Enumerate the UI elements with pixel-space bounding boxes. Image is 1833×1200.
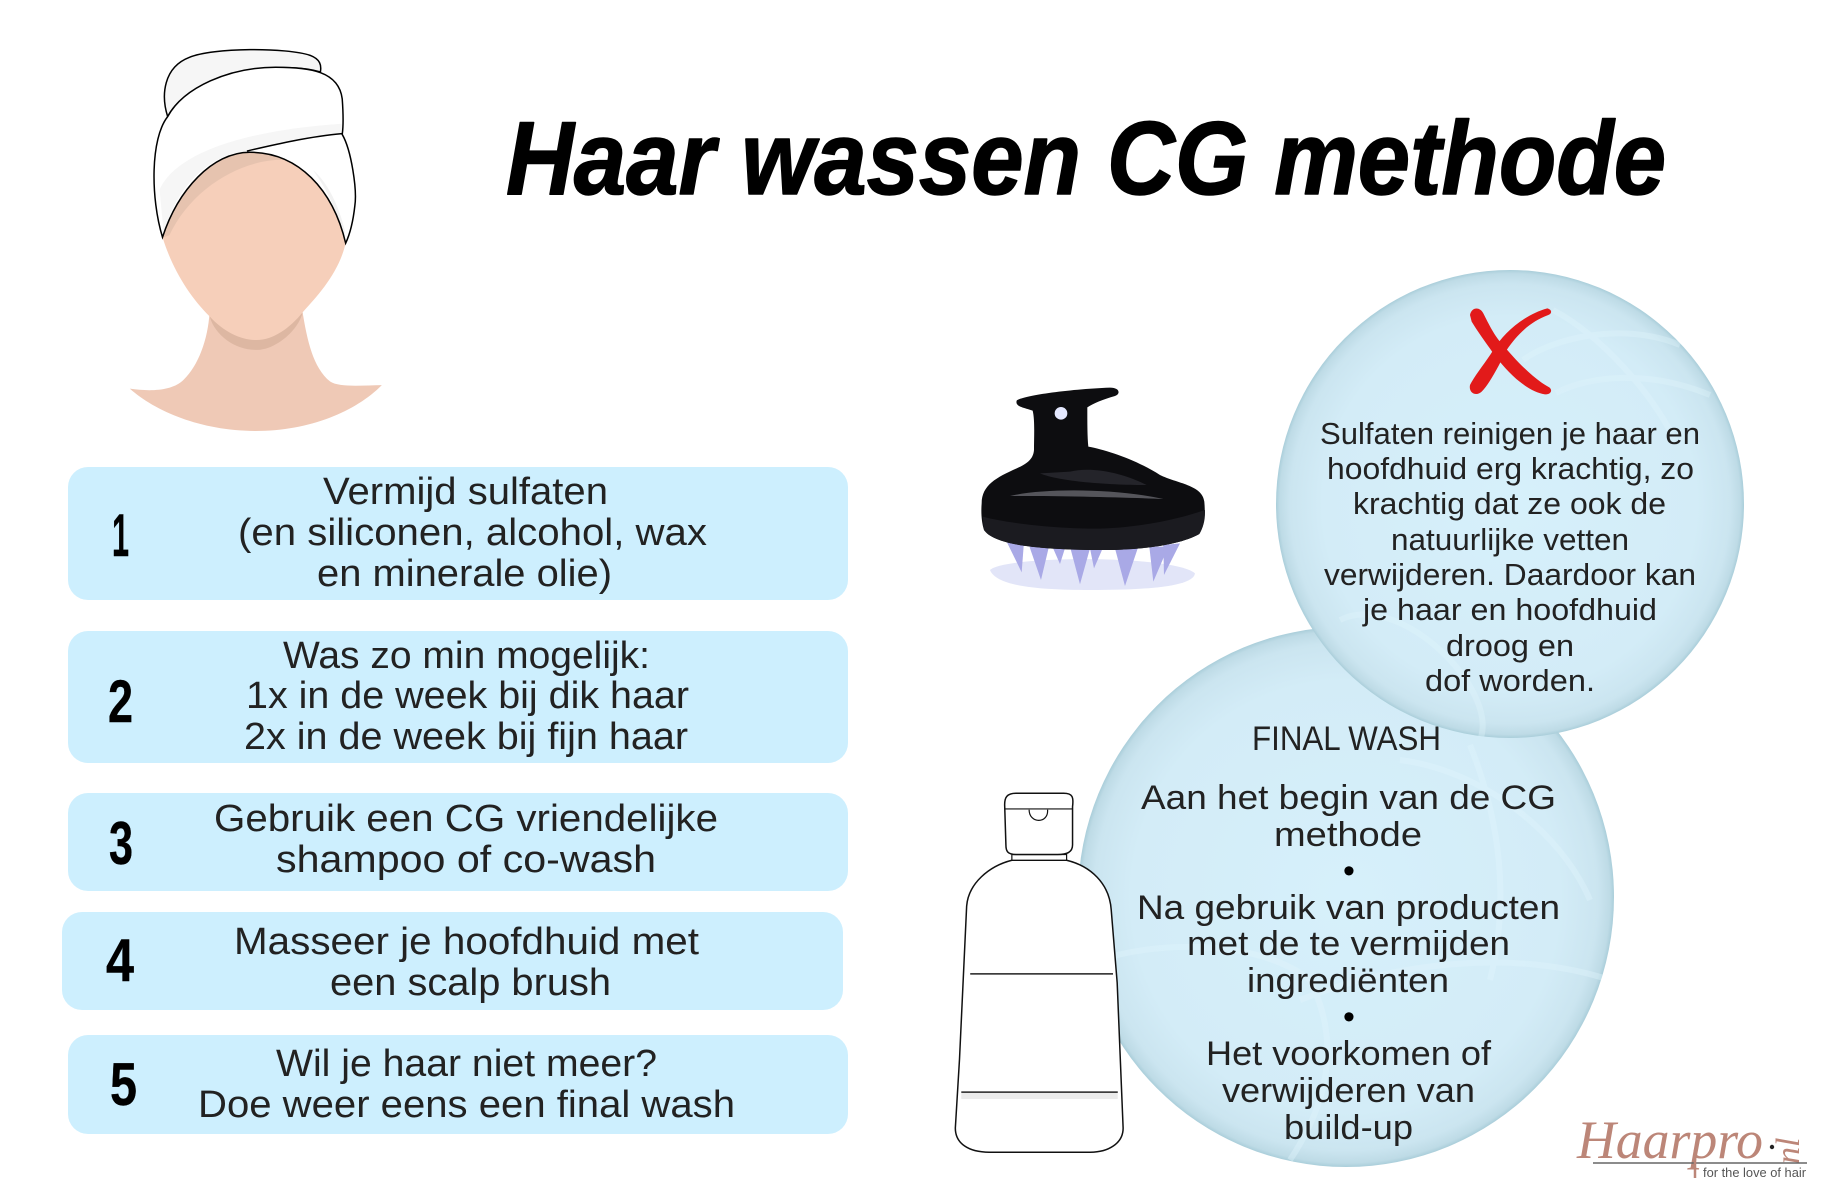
step 5 text: Doe weer eens een final wash [198,1084,735,1126]
step 3 text: Gebruik een CG vriendelijke [214,798,718,840]
step 3 text: shampoo of co-wash [276,839,656,881]
final wash text [1137,720,1560,1147]
final wash text: Aan het begin van de CG [1141,779,1556,817]
panel: step 3 [68,793,848,891]
step 4 text: een scalp brush [330,962,611,1004]
final wash text: build-up [1284,1109,1413,1147]
step 5 text [198,1043,735,1126]
step 2 text [244,635,689,758]
logo: Haarpro [1576,1110,1807,1180]
panel: step 2 [68,631,848,763]
number 3: 3 [109,810,133,877]
final wash text: • [1343,852,1355,890]
icon: red cross [1470,308,1551,394]
step 2 text: 1x in de week bij dik haar [246,675,689,717]
sulfaten text: dof worden. [1425,663,1595,698]
icon: scalp brush [981,388,1205,590]
final wash text: methode [1274,816,1422,854]
sulfaten text: hoofdhuid erg krachtig, zo [1327,451,1694,486]
panel: step 4 [62,912,843,1010]
step 4 text: Masseer je hoofdhuid met [234,921,699,963]
panel: final wash bubble [1078,627,1614,1167]
step 1 text [238,471,707,595]
number 2: 2 [108,668,133,735]
step 1 text: en minerale olie) [317,553,612,595]
icon: head with towel [130,50,382,431]
final wash text: verwijderen van [1222,1072,1475,1110]
step 4 text [234,921,699,1004]
final wash text: ingrediënten [1247,962,1449,1000]
logo: Haarpro: for the love of hair [1703,1165,1807,1180]
sulfaten text [1320,416,1700,698]
sulfaten text: krachtig dat ze ook de [1353,486,1666,521]
step 1 text: (en siliconen, alcohol, wax [238,512,707,554]
final wash text: FINAL WASH [1252,720,1441,758]
number 4: 4 [106,927,135,994]
icon: shampoo bottle [955,793,1123,1152]
final wash text: Het voorkomen of [1206,1035,1492,1073]
panel: sulfaten bubble [1276,270,1744,740]
step 5 text: Wil je haar niet meer? [276,1043,657,1085]
sulfaten text: droog en [1446,628,1574,663]
number 5: 5 [110,1051,137,1118]
number 1: 1 [112,502,129,569]
brush hole [1055,407,1067,420]
logo: Haarpro: Haarpro [1576,1110,1763,1170]
final wash text: met de te vermijden [1187,925,1510,963]
sulfaten text: Sulfaten reinigen je haar en [1320,416,1700,451]
title: Haar wassen CG methode [506,101,1666,217]
panel: step 5 [68,1035,848,1134]
final wash text: • [1343,998,1355,1036]
step 2 text: 2x in de week bij fijn haar [244,716,688,758]
logo: Haarpro: nl [1770,1138,1807,1164]
panel: step 1 [68,467,848,600]
final wash text: Na gebruik van producten [1137,889,1560,927]
step 3 text [214,798,718,881]
sulfaten text: natuurlijke vetten [1391,522,1629,557]
sulfaten text: je haar en hoofdhuid [1362,592,1657,627]
step 1 text: Vermijd sulfaten [323,471,608,513]
step 2 text: Was zo min mogelijk: [283,635,650,677]
sulfaten text: verwijderen. Daardoor kan [1324,557,1696,592]
